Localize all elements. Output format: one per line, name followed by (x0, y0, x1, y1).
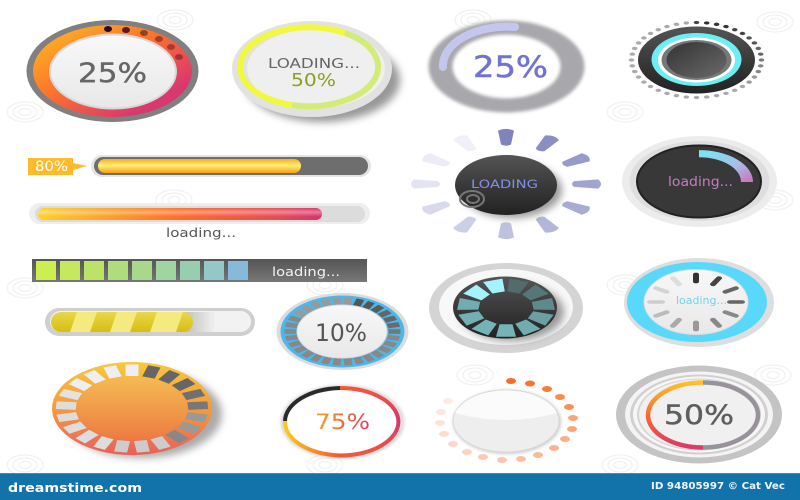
gauge: 25% orange ring (26, 20, 198, 122)
gauge: dark loading with arc (622, 136, 777, 227)
spinner: blue ring with ticks (624, 258, 774, 347)
label: 10%: 10% (315, 319, 367, 347)
label: loading: LOADING (471, 177, 538, 191)
label: 75%: 75% (315, 410, 370, 434)
gauge: 10% segmented (276, 293, 408, 370)
label: loading: loading... (668, 175, 733, 190)
spinner: dark with teal segments (429, 263, 583, 353)
progress bar: segmented squares (32, 259, 367, 282)
label: 50%: 50% (664, 400, 734, 431)
label: loading: loading... (166, 225, 236, 240)
footer logo text: dreamstime.com (8, 481, 142, 495)
gauge: 50% concentric rings (616, 366, 782, 464)
spinner: orange disc with segments (52, 362, 222, 458)
spinner: dark loading button with petals (411, 129, 601, 239)
tag: 80%: 80% (35, 159, 68, 175)
label: 50%: 50% (291, 70, 336, 91)
spinner: white button with orange dots (435, 378, 578, 463)
label: 25%: 25% (78, 58, 147, 89)
gauge: 25% purple ring (440, 27, 572, 105)
footer credit: ID 94805997 © Cat Vec (651, 481, 785, 492)
tag: 80% (28, 158, 87, 175)
gauge: 75% thin ring (282, 387, 402, 457)
label: 25%: 25% (473, 50, 548, 84)
progress bar: 80% with tag (28, 155, 371, 177)
progress bar: yellow striped (45, 308, 255, 336)
knob: dark with cyan ring and dots (629, 21, 764, 99)
gauge: loading 50% yellow-green ring (232, 21, 400, 122)
label: loading: loading... (272, 264, 340, 279)
label: loading: LOADING... (268, 57, 360, 72)
label: loading: loading... (676, 295, 727, 307)
progress bar: gradient with loading label (29, 203, 370, 240)
footer bar (0, 473, 800, 500)
